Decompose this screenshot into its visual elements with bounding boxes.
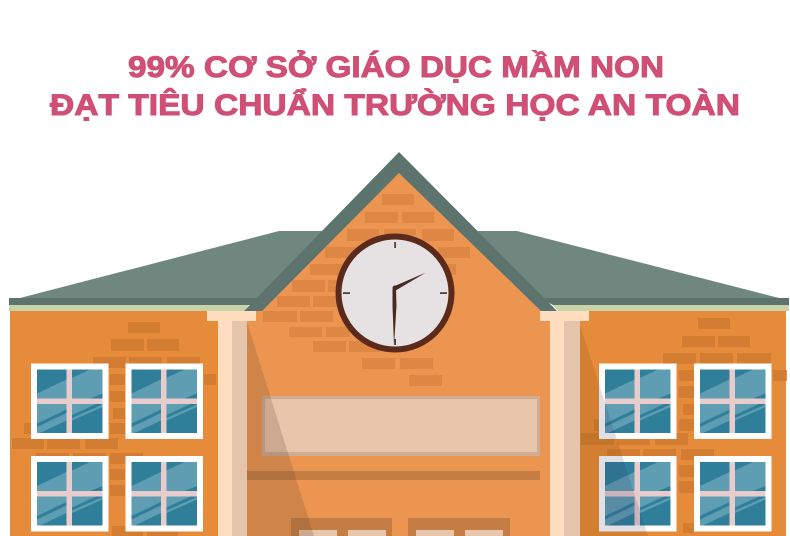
left pillar shadow — [247, 322, 314, 536]
school building — [9, 152, 789, 536]
right gutter — [553, 305, 789, 311]
central gabled wall — [240, 170, 552, 536]
gable bricks — [263, 194, 470, 386]
windows: left wing — [31, 364, 203, 532]
windows: right wing — [599, 364, 772, 532]
right door top — [408, 518, 510, 536]
left gutter — [9, 305, 249, 311]
right roof — [465, 231, 779, 298]
right eave — [540, 298, 789, 305]
gable roof — [244, 152, 557, 311]
left door top — [291, 518, 392, 536]
clock — [338, 236, 452, 350]
sign board — [262, 396, 540, 456]
title — [50, 50, 740, 122]
cornice band — [247, 471, 540, 480]
left roof — [20, 231, 335, 298]
left eave — [9, 298, 258, 305]
wall bricks — [12, 318, 787, 536]
right wing wall — [580, 311, 786, 536]
shadow across right windows — [599, 384, 646, 532]
title: ĐẠT TIÊU CHUẨN TRƯỜNG HỌC AN TOÀN — [50, 88, 740, 122]
right pillar shadow — [580, 325, 648, 536]
right pillar — [540, 311, 589, 536]
left wing wall — [10, 311, 218, 536]
title: 99% CƠ SỞ GIÁO DỤC MẦM NON — [128, 50, 664, 84]
left pillar — [207, 311, 256, 536]
